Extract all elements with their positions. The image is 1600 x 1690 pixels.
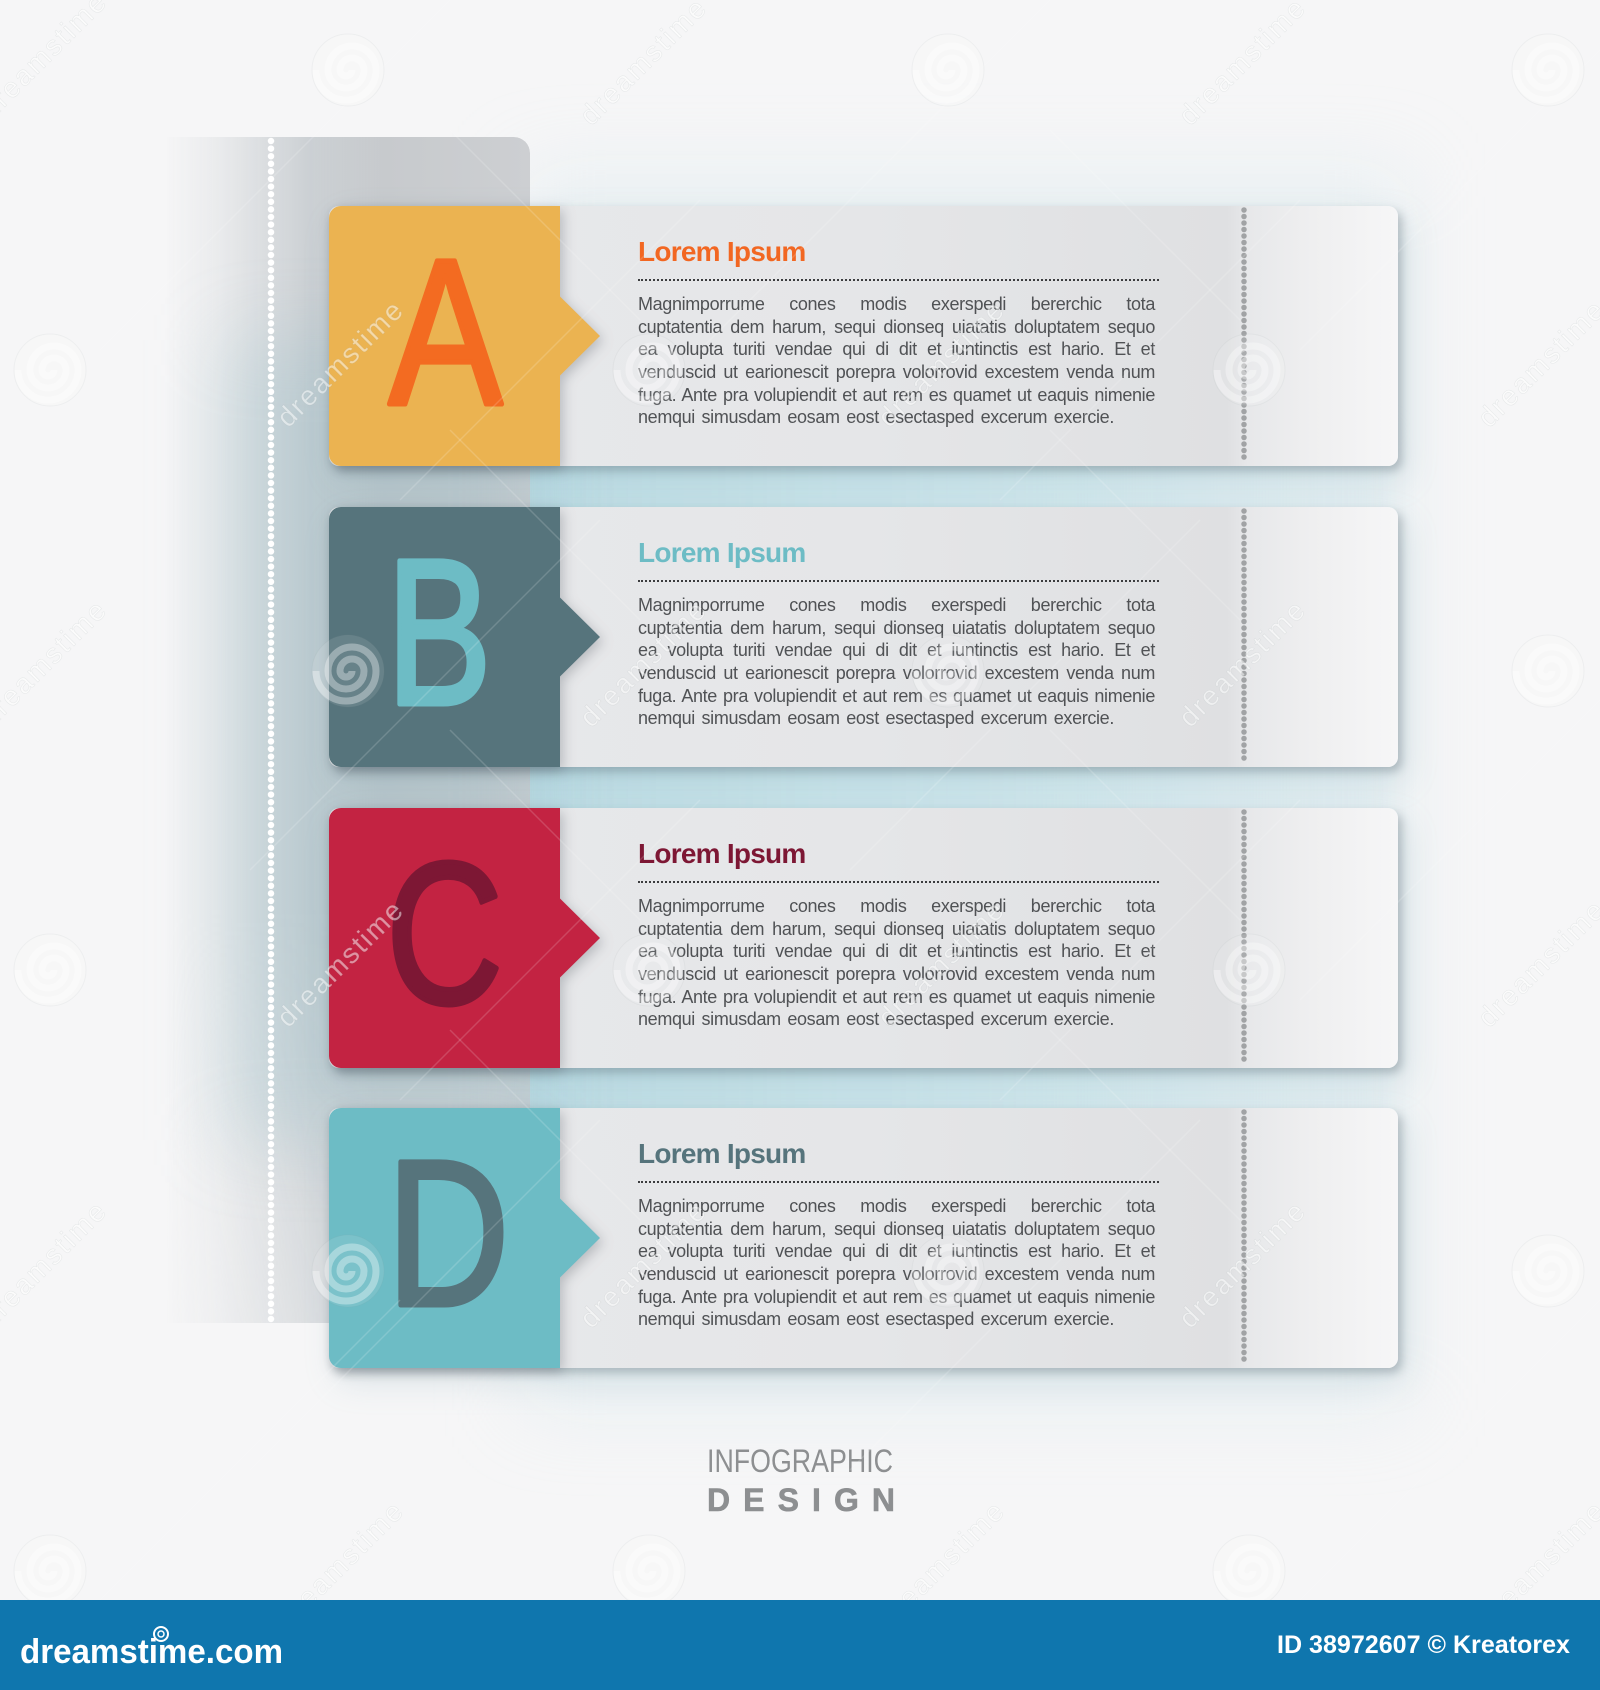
card C body text: cuptatentia dem harum, sequi dionseq uiatatis doluptatem sequo — [638, 919, 1155, 939]
card C body text: nemqui simusdam eosam eost esectasped excerum exercie. — [638, 1009, 1114, 1029]
card B body text: venduscid ut earionescit porepra volorrovid excestem venda num — [638, 663, 1155, 683]
panel: card A — [324, 202, 1414, 486]
card D tab with letter — [326, 1107, 604, 1378]
panel: card D — [322, 1104, 1414, 1390]
watermark overlay: spirals, wordmarks and lines: dreamstime — [1173, 1195, 1312, 1334]
white perforation line on backing sheet — [268, 138, 274, 1322]
card B body text: ea volupta turiti vendae qui di dit et iuntinctis est hario. Et et — [638, 640, 1155, 660]
card A perforation — [1241, 207, 1247, 460]
card B body text: nemqui simusdam eosam eost esectasped excerum exercie. — [638, 708, 1114, 728]
card B paper sheet — [329, 507, 1398, 767]
panel: card C — [324, 804, 1414, 1088]
panel: card B — [324, 504, 1414, 788]
card A body text: Magnimporrume cones modis exerspedi bererchic tota — [638, 294, 1155, 314]
card B body text: fuga. Ante pra volupiendit et aut rem es quamet ut eaquis nimenie — [638, 686, 1155, 706]
watermark overlay: spirals, wordmarks and lines: dreamstime — [872, 894, 1011, 1033]
panel: grey backing sheet — [165, 137, 530, 1323]
title: infographic design caption: DESIGN — [707, 1482, 895, 1518]
card C body text: venduscid ut earionescit porepra volorrovid excestem venda num — [638, 964, 1155, 984]
card C tab with letter: C — [386, 820, 503, 1046]
card C paper sheet — [329, 808, 1398, 1068]
watermark overlay: spirals, wordmarks and lines: dreamstime — [271, 894, 410, 1033]
soft blue background glow — [510, 430, 1390, 1140]
card A tab with letter — [328, 204, 604, 474]
watermark overlay: spirals, wordmarks and lines: dreamstime — [271, 294, 410, 433]
card A body text: fuga. Ante pra volupiendit et aut rem es quamet ut eaquis nimenie — [638, 384, 1155, 404]
card A body text: venduscid ut earionescit porepra volorrovid excestem venda num — [638, 362, 1155, 382]
blue tint on backing sheet — [225, 340, 530, 1140]
card A tab with letter: A — [389, 217, 503, 449]
card A body text: cuptatentia dem harum, sequi dionseq uiatatis doluptatem sequo — [638, 317, 1155, 337]
card A heading: Lorem Ipsum — [638, 236, 806, 267]
card B body text: Magnimporrume cones modis exerspedi bererchic tota — [638, 595, 1155, 615]
watermark overlay: spirals, wordmarks and lines: dreamstime — [574, 594, 713, 733]
card D tab with letter: D — [386, 1118, 510, 1350]
card C body text: Magnimporrume cones modis exerspedi bererchic tota — [638, 896, 1155, 916]
card B tab with letter: B — [386, 517, 492, 749]
card A paper sheet — [329, 206, 1398, 466]
footer image id and credit: ID 38972607 © Kreatorex — [1277, 1631, 1570, 1659]
card D body text: venduscid ut earionescit porepra volorrovid excestem venda num — [638, 1264, 1155, 1284]
card D body text — [638, 1196, 1156, 1329]
card D heading: Lorem Ipsum — [638, 1138, 806, 1169]
card B heading: Lorem Ipsum — [638, 537, 806, 568]
footer logo wordmark: dreamstime.com — [20, 1633, 283, 1671]
card A divider — [638, 279, 1159, 281]
watermark overlay: spirals, wordmarks and lines: dreamstime — [574, 1195, 713, 1334]
watermark overlay: spirals, wordmarks and lines: dreamstime — [872, 294, 1011, 433]
card D body text: nemqui simusdam eosam eost esectasped excerum exercie. — [638, 1309, 1114, 1329]
card D divider — [638, 1181, 1159, 1183]
card D body text: ea volupta turiti vendae qui di dit et iuntinctis est hario. Et et — [638, 1241, 1155, 1261]
card B perforation — [1241, 508, 1247, 761]
card C tab with letter — [328, 807, 604, 1076]
card D body text: Magnimporrume cones modis exerspedi bererchic tota — [638, 1196, 1155, 1216]
title: infographic design caption — [707, 1443, 895, 1518]
card B tab with letter — [328, 506, 604, 776]
card D perforation — [1241, 1109, 1247, 1362]
faint outer glow around the cards — [520, 170, 1410, 1410]
card B body text — [638, 595, 1156, 728]
card C divider — [638, 881, 1159, 883]
card C body text — [638, 896, 1156, 1029]
card D body text: fuga. Ante pra volupiendit et aut rem es quamet ut eaquis nimenie — [638, 1286, 1155, 1306]
card B divider — [638, 580, 1159, 582]
footer bar — [0, 1600, 1600, 1690]
card B body text: cuptatentia dem harum, sequi dionseq uiatatis doluptatem sequo — [638, 618, 1155, 638]
watermark overlay: spirals, wordmarks and lines: dreamstime — [1173, 594, 1312, 733]
card C body text: fuga. Ante pra volupiendit et aut rem es quamet ut eaquis nimenie — [638, 986, 1155, 1006]
card C heading: Lorem Ipsum — [638, 838, 806, 869]
card A body text: nemqui simusdam eosam eost esectasped excerum exercie. — [638, 407, 1114, 427]
card C body text: ea volupta turiti vendae qui di dit et iuntinctis est hario. Et et — [638, 941, 1155, 961]
card C perforation — [1241, 809, 1247, 1062]
card D body text: cuptatentia dem harum, sequi dionseq uiatatis doluptatem sequo — [638, 1219, 1155, 1239]
card A body text — [638, 294, 1156, 427]
card A body text: ea volupta turiti vendae qui di dit et iuntinctis est hario. Et et — [638, 339, 1155, 359]
card D paper sheet — [329, 1108, 1398, 1368]
